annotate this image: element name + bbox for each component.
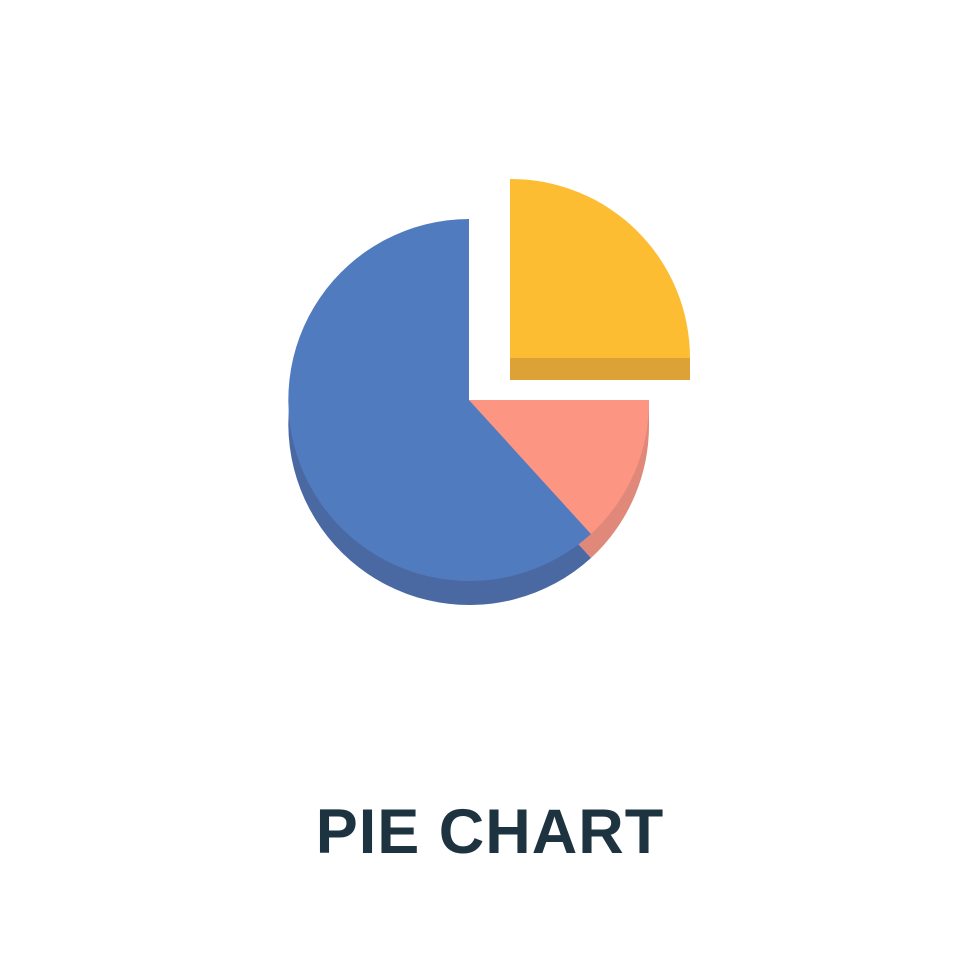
blue side bbox=[288, 243, 591, 605]
title: PIE CHART bbox=[316, 797, 664, 867]
yellow slice bbox=[510, 179, 690, 380]
salmon slice bbox=[469, 400, 649, 534]
blue slice bbox=[288, 219, 591, 581]
salmon side bbox=[469, 400, 649, 558]
